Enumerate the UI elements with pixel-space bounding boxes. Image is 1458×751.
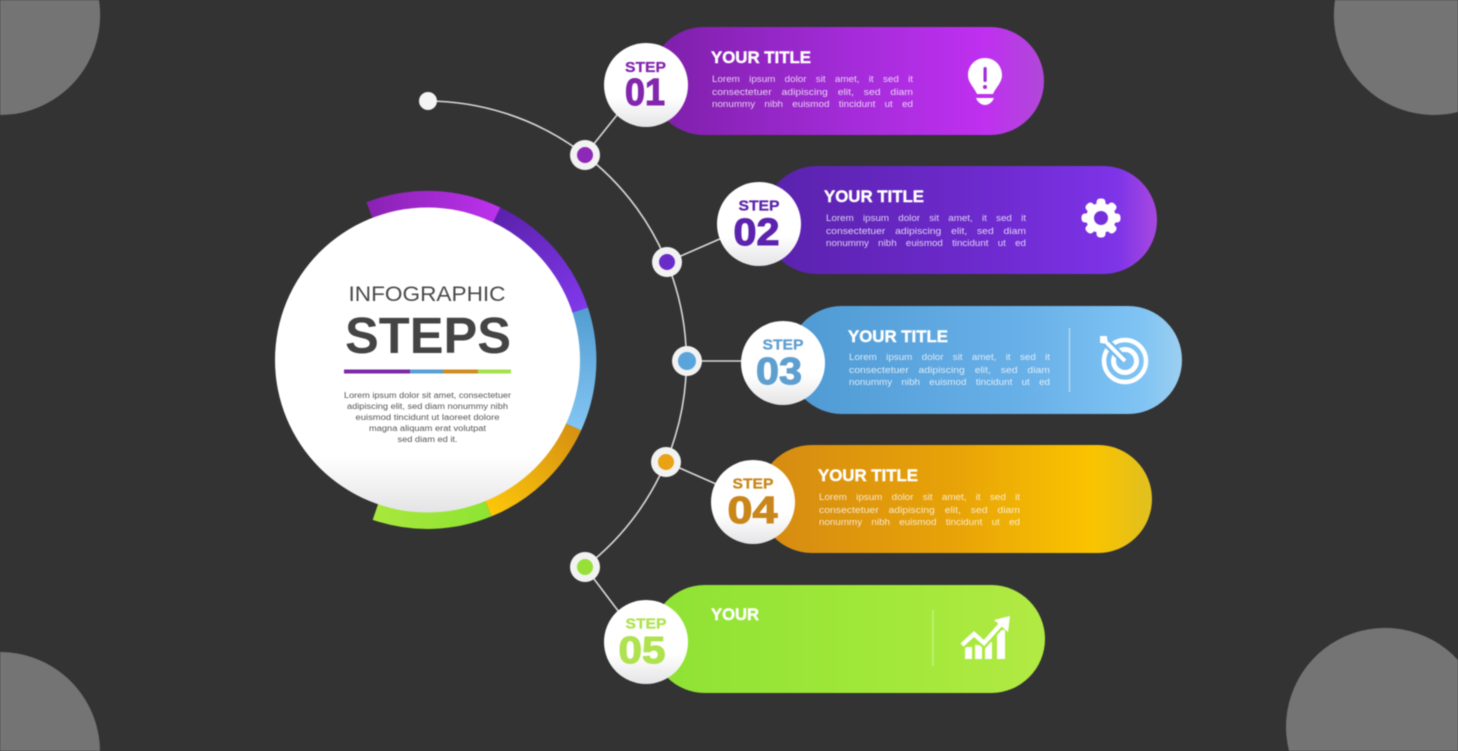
icon: growth chart: [962, 616, 1010, 659]
body text: [849, 352, 1051, 387]
bar: [788, 306, 1182, 414]
heading: infographic: INFOGRAPHIC: [348, 283, 506, 306]
colour underline: [344, 370, 511, 374]
body text: Lorem ipsum dolor sit amet, it sed it: [819, 492, 1021, 502]
icon: gear: [1082, 198, 1120, 238]
body text: consectetuer adipiscing elit, sed diam: [819, 505, 1020, 515]
connector: [666, 462, 716, 484]
step number: 04: [728, 490, 778, 532]
body text: [819, 492, 1021, 527]
step number: 05: [618, 630, 666, 672]
node: [570, 140, 600, 170]
central body text: [344, 391, 511, 444]
central body text: euismod tincidunt ut laoreet dolore: [356, 413, 500, 422]
corner circle: top left: [0, 0, 100, 115]
central body text: sed diam ed it.: [398, 435, 458, 444]
step 3: [672, 306, 1182, 414]
body text: nonummy nibh euismod tincidunt ut ed: [819, 517, 1020, 527]
timeline arc: [428, 101, 686, 567]
divider: [1068, 328, 1070, 392]
step 5: [570, 552, 1045, 693]
connector: [687, 360, 745, 362]
corner circle: bottom right: [1286, 628, 1458, 751]
step 4: [651, 445, 1152, 553]
corner circle: bottom left: [0, 652, 100, 751]
body text: nonummy nibh euismod tincidunt ut ed: [849, 377, 1050, 387]
step label: STEP: [762, 336, 804, 354]
bar: [651, 585, 1045, 693]
body text: Lorem ipsum dolor sit amet, it sed it: [712, 74, 914, 84]
body text: [826, 213, 1027, 248]
badge circle: [741, 321, 825, 405]
body text: nonummy nibh euismod tincidunt ut ed: [712, 99, 913, 109]
node: [570, 552, 600, 582]
bar: [650, 27, 1044, 135]
corner circle: top right: [1334, 0, 1458, 115]
body text: Lorem ipsum dolor sit amet, it sed it: [826, 213, 1027, 223]
bar: [763, 166, 1157, 274]
body text: consectetuer adipiscing elit, sed diam: [712, 87, 913, 97]
body text: Lorem ipsum dolor sit amet, it sed it: [849, 352, 1051, 362]
white disc: [275, 208, 580, 512]
icon: light bulb: [968, 58, 1002, 105]
step 1: [570, 27, 1044, 170]
divider: [932, 610, 934, 666]
body text: nonummy nibh euismod tincidunt ut ed: [826, 238, 1026, 248]
body text: consectetuer adipiscing elit, sed diam: [826, 226, 1026, 236]
badge circle: [604, 600, 688, 684]
node: [651, 447, 681, 477]
title: YOUR TITLE: [848, 327, 948, 346]
ring segments: [370, 200, 587, 520]
title: YOUR: [711, 605, 759, 624]
step label: STEP: [626, 616, 666, 632]
central body text: magna aliquam erat volutpat: [369, 424, 487, 433]
bar: [758, 445, 1152, 553]
step 2: [652, 166, 1157, 277]
step label: STEP: [738, 198, 780, 214]
step number: 01: [625, 72, 665, 114]
step label: STEP: [732, 476, 774, 492]
node: [672, 346, 702, 376]
step label: STEP: [625, 59, 666, 76]
badge circle: [711, 460, 795, 544]
connector: [585, 567, 625, 620]
title: YOUR TITLE: [824, 187, 924, 206]
timeline start dot: [419, 92, 437, 110]
heading: steps: STEPS: [345, 307, 511, 364]
central body text: adipiscing elit, sed diam nonummy nibh: [347, 402, 508, 411]
step number: 02: [734, 212, 780, 254]
icon: target: [1101, 337, 1146, 382]
connector: [585, 105, 625, 155]
badge circle: [717, 182, 801, 266]
badge circle: [604, 43, 688, 127]
node: [652, 247, 682, 277]
step number: 03: [756, 351, 802, 393]
body text: [712, 74, 914, 109]
connector: [667, 238, 722, 262]
central body text: Lorem ipsum dolor sit amet, consectetuer: [344, 391, 511, 400]
body text: consectetuer adipiscing elit, sed diam: [849, 365, 1050, 375]
title: YOUR TITLE: [818, 466, 918, 485]
title: YOUR TITLE: [711, 48, 811, 67]
central circle with coloured ring: [275, 200, 587, 520]
